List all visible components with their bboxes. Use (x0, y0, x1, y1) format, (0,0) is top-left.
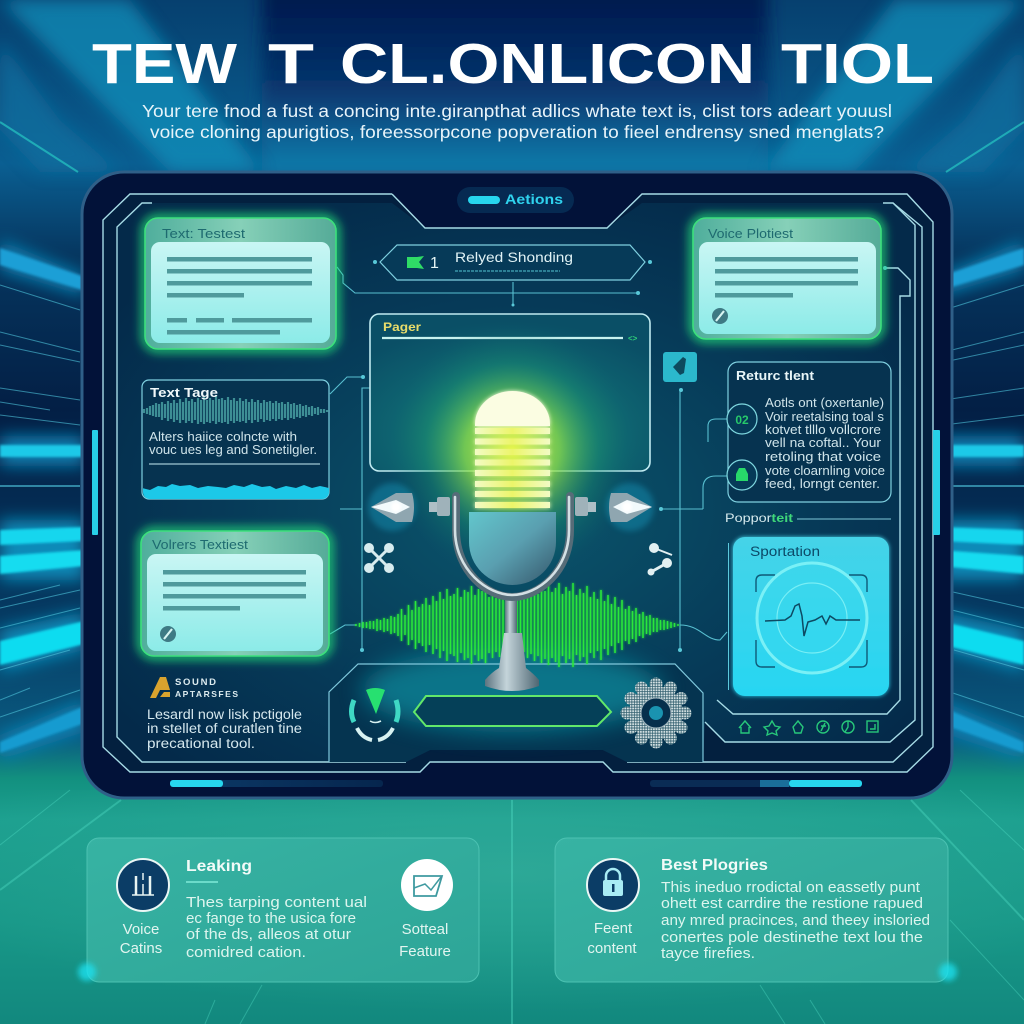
popportent label: Poppor teit (725, 511, 793, 525)
subtitle: voice cloning apurigtios, foreessorpcone popveration to fieel endrensy sned menglats? (150, 122, 884, 142)
card: best plogries: any mred pracinces, and theey insloried (661, 913, 930, 929)
banner: relayed sounding: 1 (430, 255, 439, 272)
icon: gold logo (150, 677, 170, 698)
panel: return tent (727, 362, 891, 502)
title: CL.ONLICON (340, 32, 755, 96)
icon: pencil (712, 308, 728, 324)
panel: center pager: <> (628, 334, 638, 343)
chart: ecg line (765, 604, 860, 636)
green hexagon field (414, 696, 611, 726)
panel: return tent: kotvet tlllo vollcrore (765, 423, 881, 437)
sound block (147, 677, 302, 751)
panel: return tent: vell na coftal.. Your (765, 436, 881, 450)
card: leaking: Sotteal (402, 921, 448, 938)
panel: text tage: vouc ues leg and Sonetilgler. (149, 443, 317, 457)
stem (505, 596, 517, 636)
banner: relayed sounding (380, 245, 645, 280)
badge: green icon (727, 460, 757, 490)
sound block: in stellet of curatlen tine (147, 721, 302, 736)
panel: text tage (142, 380, 329, 500)
card: leaking (78, 838, 479, 982)
panel: return tent: Returc tlent (736, 368, 815, 383)
side scroll bar right (933, 430, 940, 535)
card: voice plotiest (693, 218, 881, 339)
card: leaking: Voice (123, 921, 159, 938)
panel: center pager (370, 314, 650, 471)
microphone (429, 391, 596, 691)
icon: lock badge (587, 859, 639, 911)
icon: cross tool (364, 544, 394, 572)
subtitle (142, 101, 892, 142)
actions pill (457, 187, 574, 213)
glow behind mic (387, 325, 637, 575)
card: voice plotiest: Voice Plotiest (708, 226, 793, 241)
icon: left crystal emitter (368, 483, 416, 531)
panel: return tent: retoling that voice (765, 450, 881, 464)
title: TIOL (781, 32, 934, 96)
panel: return tent: Voir reetalsing toal s (765, 410, 884, 424)
panel: return tent: vote cloarnling voice (765, 464, 885, 478)
card: best plogries: ohett est carrdire the restione rapued (661, 896, 923, 912)
badge: 02: 02 (735, 413, 749, 427)
sound block: SOUND (175, 677, 216, 688)
title: TEW (92, 32, 237, 96)
bottom scroll bar right (650, 780, 862, 787)
sound block: Lesardl now lisk pctigole (147, 707, 302, 722)
card: leaking: Catins (120, 940, 162, 957)
card: volrers textiest (141, 531, 329, 656)
sound block: APTARSFES (175, 689, 238, 699)
side scroll bar left (92, 430, 98, 535)
panel: text tage: Alters haiice colncte with (149, 430, 297, 444)
panel: center pager: Pager (383, 322, 422, 334)
left speed streaks (0, 240, 84, 760)
waveform: teal (144, 396, 327, 424)
panel: return tent: feed, lorngt center. (765, 477, 880, 491)
mic bowl (469, 512, 556, 585)
card: leaking: ec fange to the usica fore (186, 911, 356, 927)
icon: pencil (160, 626, 176, 642)
icon: square tool (663, 352, 697, 382)
panel: text tage: Text Tage (150, 385, 218, 400)
banner: relayed sounding: Relyed Shonding (455, 249, 573, 265)
card: best plogries: Feent (594, 920, 633, 937)
card: best plogries: conertes pole destinethe text lou the (661, 930, 923, 946)
sound block: precational tool. (147, 736, 255, 751)
connector lines (330, 267, 727, 650)
floor (0, 790, 1024, 1024)
card: sportation: Sportation (750, 544, 820, 559)
icon: link tool (648, 544, 672, 575)
card: leaking: of the ds, alleos at otur (186, 927, 351, 943)
waveform: cyan fill (142, 484, 329, 500)
right speed streaks (940, 240, 1024, 760)
green waveform (356, 583, 678, 667)
card: volrers textiest: Volrers Textiest (152, 537, 248, 552)
card: sportation (728, 537, 889, 696)
title (92, 32, 934, 96)
icon row (739, 721, 878, 735)
card: leaking: Feature (399, 943, 451, 960)
card: text testest: Text: Testest (162, 226, 245, 241)
card: best plogries: content (587, 940, 637, 957)
panel: main device (82, 172, 952, 798)
card: leaking: comidred cation. (186, 945, 306, 961)
mic head (475, 391, 550, 508)
card: best plogries (555, 838, 957, 982)
icon: green radar (352, 688, 398, 740)
bolts (429, 497, 596, 516)
panel: bottom center control (329, 648, 703, 762)
card: best plogries: Best Plogries (661, 857, 768, 874)
panel: return tent: Aotls ont (oxertanle) (765, 396, 884, 410)
icon: right crystal emitter (606, 483, 654, 531)
card: best plogries: tayce firefies. (661, 946, 755, 962)
frame lines (103, 194, 933, 772)
card: leaking: Thes tarping content ual (186, 895, 367, 911)
card: text testest (145, 218, 336, 349)
title: T (268, 32, 314, 96)
bottom scroll bar left (170, 780, 383, 787)
icon: gear (620, 678, 692, 748)
subtitle: Your tere fnod a fust a concing inte.giranpthat adlics whate text is, clist tors adeart youusl (142, 101, 892, 121)
actions pill: Aetions (505, 191, 563, 207)
card: leaking: Leaking (186, 858, 252, 875)
icon: voice badge (117, 859, 169, 911)
badge: 02 (727, 404, 757, 434)
base (485, 633, 539, 691)
icon: green camera (407, 256, 424, 269)
yoke (455, 496, 570, 597)
card: best plogries: This ineduo rrodictal on eassetly punt (661, 880, 920, 896)
icon: feature badge (401, 859, 453, 911)
